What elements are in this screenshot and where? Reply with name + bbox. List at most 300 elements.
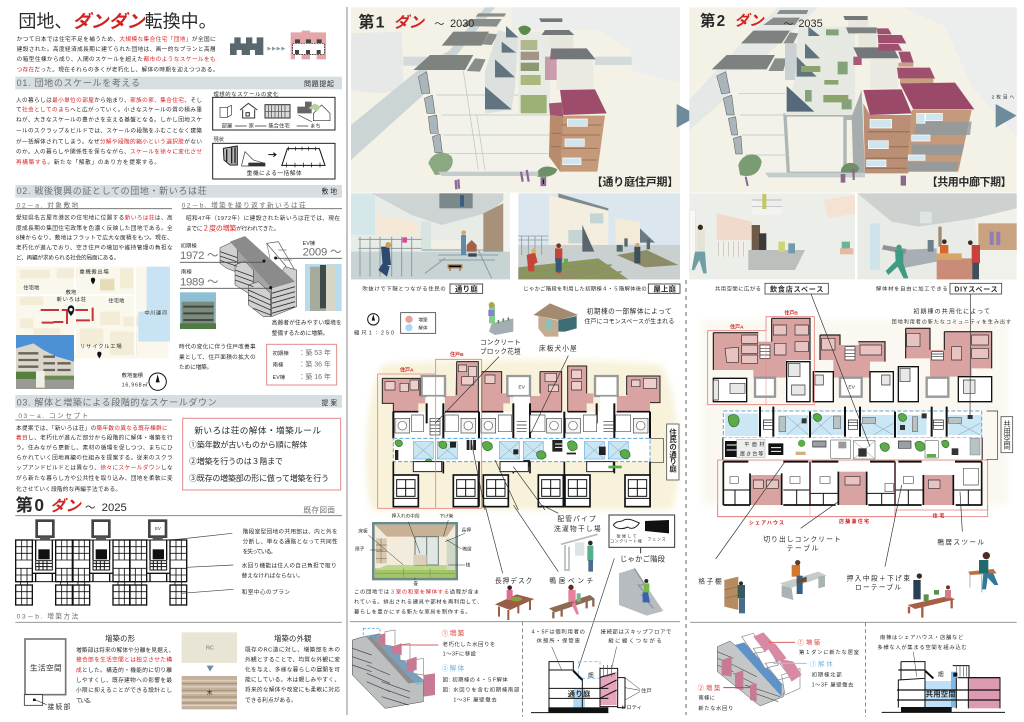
site texture [366,359,679,510]
note: commons: 住戸にコモンスペースが生まれる [584,317,674,325]
section band 01 [15,77,342,89]
dashed divider [685,280,687,715]
02-b heading: 02－b. 増築を繰り返す新いろは荘 [182,200,306,209]
icon: scale down diagram [230,31,326,59]
rule box [183,418,341,490]
tatami room drawing: 桟 [466,561,471,567]
age table: 初期棟 [273,349,289,357]
section 01 text: て社会としてのまちへと広がっていく。小さなスケールの質の積み重 [16,105,202,113]
intro text: 建設された。高度経済成長期に建てられた団地は、画一的なプランと高層 [17,45,216,53]
03-a text [16,424,173,493]
floor plan lower [723,462,982,505]
site area and compass: 敷地面積 [122,371,144,379]
section 01 text: のか。人の暮らしや関係性を保ちながら、スケールを徐々に変化させ [16,148,202,156]
callout: gabion stairs: コンクリート塊 [610,537,642,543]
figure: gabion stairs [619,568,663,616]
unit outlines: 住戸B [450,351,464,358]
age table: ：築 53 年 [298,348,331,357]
labels stage 2 isometric: 初期棟北部 [812,671,842,679]
03-a text: 着目し、老朽化が進んだ部分から段階的に解体・増築を行 [16,434,173,442]
divider [690,621,1017,624]
02-b notes: ために増築。 [179,363,212,371]
building era labels: 1972 ～ [180,250,218,262]
03-a text: 本提案では、「新いろは荘」の築年数の異なる既存棟群に [16,424,168,432]
unit labels: シェアハウス [749,519,784,526]
extension form text: ている。 [76,698,94,705]
perspective: restaurant space [689,193,855,279]
section band 02: 敷地 [322,187,337,196]
furniture: bench: 鴨居ベンチ [549,576,594,585]
building era labels [180,239,342,289]
03-a heading: 03－a. コンセプト [18,412,88,420]
section 01 text [16,96,202,166]
caption: restaurant space [715,283,828,294]
heading: stage 2: ダン [734,12,765,29]
section stage 2: 共用空間 [926,690,956,699]
unit labels [749,512,944,526]
section 01 text: が一括解体されてしまう。なぜ分解や段階的縮小という選択肢がない [16,137,202,145]
section stage 1: 通り庭 [568,690,591,699]
site texture [702,320,1008,505]
panel: stage 2 perspectives [689,193,1017,294]
tatami room drawing: 障子 [355,546,365,553]
caption: DIY space: DIYスペース [954,285,998,293]
notes: floor plan: 替えなければならない。 [242,571,303,579]
panel: stage 2 plan [702,294,1013,517]
section stage 2: 畑 [938,671,944,679]
section stage 2: 南棟はシェアハウス・店舗など [880,633,964,641]
divider dashed [521,622,523,717]
extension appearance text: 将来的な解体や改変にも柔軟に対応 [245,685,340,693]
tatami room drawing [355,513,472,587]
label: shared space [987,411,1013,459]
figure: dog house [533,303,578,337]
furniture: concrete table: 切り出しコンクリート [763,534,841,543]
floor plan [382,362,660,507]
panel: stage 2 furniture and sections [690,462,1017,717]
site map [16,267,170,358]
02-a text: 度成長期の集団住宅政策を色濃く反映した団地である。全 [16,224,173,232]
heading: stage 2: 2035 [798,18,823,30]
isometric stage 2 [717,632,802,706]
section stage 1: 接続部はスキップフロアで [601,627,671,635]
age table: ：築 16 年 [298,372,331,381]
diagram: ideal scale change: 理想的なスケールの変化 [213,90,279,98]
furniture: concrete table: テーブル [787,543,819,552]
tatami room drawing: 畳 [413,581,418,587]
leader lines [485,505,614,668]
labels stage 2 isometric: ①増築 [798,637,821,646]
site area and compass [122,371,166,390]
note: community: 団地利用者の新たなコミュニティを生み出す [892,318,1011,325]
perspective: passage garden [351,193,510,279]
site map: 住宅地 [108,297,125,305]
labels stage 1 isometric: 1～3F 屋壁撤去 [453,696,497,704]
notes: floor plan: 水回り機能は住人の自己負担で取り [242,561,337,569]
site map: 住宅地 [23,283,40,291]
age table [267,344,337,385]
title: 団地、ダンダン転換中。 [18,11,217,31]
site area and compass: 16,968㎡ [122,381,148,389]
legend [401,313,436,333]
divider [350,620,680,623]
intro text: の箱型住棟から成り、人間のスケールを超えた都市のようなスケールをも [17,55,216,63]
section 01 text: ールのスクラップ＆ビルドでは、スケールの段階をふむことなく建築 [16,127,202,135]
furniture: concrete table [763,534,841,600]
perspective: roof garden [518,193,680,279]
unit outlines: 住戸A [400,367,414,374]
labels stage 2 isometric: 1～3F 屋壁撤去 [812,681,854,689]
section stage 1: 4・5Fは個利用者の [532,627,585,635]
heading: stage 1: ～ [434,19,444,30]
caption: passage garden: 通り庭 [455,284,478,293]
site photo [16,335,74,389]
figure: planter [488,302,513,335]
section band 03 [15,395,342,408]
heading: stage 0: ダン [50,497,82,515]
section 01 text: 人の暮らしは最小単位の部屋から始まり、家族の家、集合住宅、そし [16,96,202,104]
furniture: lattice shelf: 格子棚 [698,577,722,586]
leader lines [716,462,962,567]
03 lower [15,521,342,711]
diagram: current state: 重機による一括解体 [247,169,302,177]
note: commons [584,306,674,325]
note: community [892,307,1011,325]
unit outlines [708,309,814,405]
section band 02: 02. 戦後復興の証としての団地・新いろは荘 [17,185,207,196]
02-b notes: 時代の変化に伴う住戸改善事 [179,342,256,350]
section stage 1: 住戸 [641,686,652,694]
label: shared space: 共用空間 [1002,419,1011,450]
extension appearance text: できる利点がある。 [245,696,297,704]
extension form text: しやすくし、既存建物への影響を最 [76,676,172,684]
labels stage 1 isometric: 老朽化した水回りを [443,640,495,648]
02-a text: 愛知県名古屋市港区の住宅地に位置する新いろは荘は、高 [16,213,173,221]
building era labels: EV棟 [303,239,316,247]
extension plan diagram: 生活空間 [30,663,62,673]
caption: passage garden: 吹抜けで下階とつながる住民の [362,285,446,293]
extension form text: 増築の形 [105,634,136,643]
labels stage 1 isometric [400,629,520,704]
rule box: ②増築を行うのは３階まで [189,456,283,466]
03-a text: う。住みながら更新し、素材の循環を促しつつ、まちにひ [16,443,173,451]
arrow [677,104,698,128]
age table: ：築 36 年 [298,360,331,369]
furniture: bench [549,576,595,618]
section band 03: 提案 [322,398,337,407]
material swatches [182,632,237,709]
diagram: ideal scale change: 家 [249,122,255,130]
lower furniture row [723,438,982,460]
diagram: current state: 現状 [213,135,225,143]
labels stage 2 isometric [698,637,860,712]
panel: stage 2 rendering [689,7,1017,193]
diagram: ideal scale change [213,90,335,130]
furniture: low table [847,573,955,618]
divider dashed [865,622,867,717]
02-b text: 昭和47年（1972年）に建設された新いろは荘では、現在 [186,214,340,222]
section stage 1 [531,627,671,713]
extension form text: 小限に抑えることができる設計とし [76,686,172,694]
leader lines [435,356,568,510]
label: residents passage: 住民の通り庭 [668,428,677,473]
furniture: lattice shelf [698,577,745,613]
02-b notes: 整備するために増築。 [272,329,328,337]
age table: EV棟 [273,373,286,381]
material swatches: RC [206,645,214,651]
photo: EV block [305,264,342,311]
extension form text: 成とした。構造的・機能的に切り離 [76,666,172,674]
caption: restaurant space: 共用空間に広がる [715,285,761,293]
02-b notes [179,318,342,371]
diagram: current state [213,135,335,179]
label: planter: ブロック花壇 [480,347,521,356]
diagram: ideal scale change: 集合住宅 [268,122,290,130]
compass and scale [354,314,394,337]
furniture: stool [937,538,998,592]
02-a text: 8棟からなり、敷地はフラットで広大な面積をもつ。現在、 [16,234,173,242]
legend: 解体 [418,325,428,332]
callout: gabion stairs: じゃかご階段 [620,554,666,563]
lower furniture row: 平面材 [744,441,764,448]
lower outline divider [810,460,895,517]
text: reused fittings: れている。排出される建具や部材を再利用して、 [354,597,482,605]
furniture: laundry rack: 配管パイプ [557,514,596,523]
perspective: DIY space [857,193,1017,279]
extension form text: 接合部を生活空間とは独立させた構 [76,656,172,664]
heading: stage 0: ～ [85,502,96,514]
section band 02 [15,185,342,198]
arrow [996,104,1017,128]
section 02 [15,185,342,390]
unit labels: 住宅 [933,512,944,519]
section stage 1: 休憩所・保管庫 [537,637,581,645]
caption: restaurant space: 飲食店スペース [770,284,823,293]
note: shared space [172,528,338,555]
furniture: laundry rack: 洗濯物干し場 [554,524,601,533]
label: dog house: 床板犬小屋 [539,343,577,352]
existing floor plan: EV [155,526,161,531]
site map: 敷地 [66,288,77,296]
building era labels: 2009 ～ [303,247,341,259]
heading: stage 2: 第2 [700,12,725,30]
lower furniture row: 置き台等 [740,451,763,458]
panel: stage 1 perspectives [351,193,680,293]
unit outlines: 住戸B [784,309,798,316]
heading: stage 0 [15,495,342,516]
02-b text [186,214,340,233]
section stage 1: 畑 [588,672,594,680]
extension appearance text: 外観とすることで、均質な外観に変 [245,656,340,664]
note: next sheet: 2枚目へ [992,93,1015,100]
section band 01: 01. 団地のスケールを考える [17,77,140,88]
03-a text: ップアンドビルドとは異なり、徐々にスケールダウンしな [16,463,173,471]
site map: 中川運河 [144,308,168,316]
label: planter: コンクリート [480,339,521,347]
labels stage 2 isometric: ①解体 [810,659,833,668]
section 01 text: ねが、大きなスケールの豊かさを支える基盤となる。しかし団地スケ [16,115,202,123]
material swatches: 木 [207,689,213,697]
callout: gabion stairs: フェンス [647,537,666,542]
labels stage 1 isometric: ②解体 [442,664,465,673]
tatami room drawing: 下げ束 [439,513,454,520]
photo: south block [180,292,216,329]
note: community: 初期棟の共用化によって [913,307,990,315]
building era labels: 1989 ～ [180,277,218,289]
rule box: ①築年数が古いものから順に解体 [189,440,307,450]
heading: stage 2: ～ [783,20,793,31]
extension plan diagram: 接続部 [48,702,71,711]
caption: roof garden: じゃかご階段を利用した初期棟４・５階解体後の [523,285,647,293]
tatami room drawing: 長押 [462,527,471,534]
labels stage 1 isometric: ①増築 [442,629,465,638]
03-b heading: 03－b. 増築方法 [17,611,79,620]
heading: stage 1: 第1 [358,12,385,31]
site map: リサイクル工場 [80,342,122,350]
intro text: かつて日本では住宅不足を補うため、大規模な集合住宅「団地」が全国に [17,35,216,43]
section stage 2 [877,633,1005,712]
rule box: ③既存の増築部の形に倣って増築を行う [189,473,329,483]
rule box: 新いろは荘の解体・増築ルール [194,424,321,435]
extension form text [76,634,174,705]
age table: 南棟 [273,361,284,369]
02-a heading: 02－a. 対象敷地 [17,200,79,209]
extension appearance text: 増築の外観 [274,634,312,643]
03-a text: らかれていく団地再編の仕組みを提案する。従来のスクラ [16,453,173,461]
caption: stage 2: 【共用中廊下期】 [927,174,1012,188]
notes: floor plan [182,561,337,596]
heading: stage 2 [700,12,823,31]
diagram: ideal scale change: 部屋 [222,123,233,130]
isometric building [220,236,297,317]
lower outline [718,460,988,517]
floor plan upper: EV [848,384,856,390]
extension appearance text: 化を与え、多様な暮らしの展開を可 [245,666,340,674]
section stage 2: 多様な人が集まる空間を組み込む [877,643,967,651]
heading: stage 0: 既存図面 [303,504,335,514]
extension form text: 増築部は将来の解体や分離を見据え、 [76,646,174,654]
extension appearance text [245,634,340,704]
text: reused fittings [354,587,482,615]
leader lines [811,294,971,447]
labels stage 1 isometric: 図: 初期棟の４・５F解体 [443,676,508,684]
unit outlines [378,351,482,508]
labels stage 1 isometric: 図: 水回りを含む初期棟南部 [443,686,520,694]
02-b notes: 高齢者が住みやすい環境を [272,318,342,326]
panel: stage 1 furniture and sections [350,505,680,717]
site map: 重機搬出場 [79,268,109,276]
03-a text: 化させていく段階的な再編手法である。 [16,485,121,493]
note: shared space: を失っている。 [243,547,276,555]
note: commons: 初期棟の一部解体によって [587,306,672,315]
existing floor plan [16,521,187,605]
floor plan upper [713,318,992,402]
02-b notes: 業として、住戸面積の拡大の [179,353,256,361]
labels stage 2 isometric: 南棟に [698,693,715,701]
furniture: low table: 押入中段＋下げ束 [847,573,910,582]
labels stage 1 isometric: 1～3Fに移設 [443,650,477,658]
caption: stage 1: 【通り庭住戸期】 [592,174,678,188]
callout: gabion stairs: 耐候して [617,533,637,539]
note: shared space: 分断し、単なる通路となって共同性 [243,538,338,546]
building era labels: 南棟 [181,267,192,275]
column divider [346,7,348,715]
furniture: stool: 鴨居スツール [937,538,984,547]
02-b text: までに２度の増築が行われてきた。 [186,224,279,233]
heading: stage 0: 第0 [16,495,44,515]
callout: gabion stairs [609,515,675,563]
furniture: low table: ローテーブル [855,583,901,592]
section band 01: 問題提起 [304,79,334,88]
furniture: desk: 長押デスク [495,576,532,585]
heading: stage 1 [358,12,474,31]
section 01 text: 再構築する。新たな「解散」のあり方を提案する。 [16,158,160,166]
02-a text: 老朽化が進んでおり、空き住戸の増加や維持管理の負担な [16,244,173,252]
caption: DIY space: 解体材を自由に加工できる [876,285,948,293]
section 01 [15,77,342,179]
extension plan diagram [24,639,71,711]
section stage 1: 縦に緩くつながる [608,636,662,644]
notes: floor plan: 和室中心のプラン [242,588,290,596]
text: reused fittings: この団地では３室の和室を解体する過程が含ま [354,587,479,595]
tatami room drawing: 鴨居 [462,546,472,553]
caption: passage garden [362,284,483,293]
caption: roof garden: 屋上庭 [653,284,677,293]
unit outlines: 住戸A [730,323,744,330]
tatami room drawing: 押入れの中段 [392,513,420,520]
heading: stage 1: 2030 [450,18,474,30]
labels stage 2 isometric: ②増築 [698,683,721,692]
label: residents passage [650,424,679,480]
note: shared space: 階段室型団地の共用部は、内と外を [243,528,338,536]
compass and scale: 縮尺1：250 [354,329,394,337]
diagram: ideal scale change: まち [310,123,321,130]
02-a text [16,213,173,262]
panel: stage 1 rendering [351,7,698,193]
furniture: desk [495,576,534,620]
site map: 新いろは荘 [57,295,87,303]
isometric stage 1 [352,628,435,708]
legend: 増築 [418,316,428,323]
furniture: laundry rack [554,514,601,572]
extension appearance text: 能にしている。木は親しみやすく、 [245,676,340,684]
text: reused fittings: 暮らしを豊かにする新たな家具を制作する。 [354,607,471,615]
label: planter [480,339,521,356]
plan bottom [718,505,988,517]
floor plan: EV [518,384,526,390]
heading: stage 1: ダン [393,13,426,31]
labels stage 2 isometric: 第１ダンに新たな居室 [799,648,860,656]
heading: stage 0: 2025 [102,502,127,514]
panel: stage 1 plan [354,302,679,510]
section stage 1: ピロティ [621,704,642,711]
intro text: つ存在だった。現在それらの多くが老朽化し、解体の時期を迎えつつある。 [17,65,218,73]
02-a text: ど、再編が求められる社会的局面にある。 [16,254,119,262]
title and intro [17,11,326,73]
left column [15,11,342,711]
caption: DIY space [876,283,1002,294]
section 03 [15,395,342,555]
03-a text: がら新たな暮らし方や公共性を取り込み、団地を柔軟に変 [16,474,173,482]
section band 03: 03. 解体と増築による段階的なスケールダウン [17,396,217,407]
extension appearance text: 既存のRC造に対し、増築部を木の [245,646,340,654]
shared corridor [723,407,982,460]
building era labels: 初期棟 [181,241,197,249]
tatami room drawing: 床板 [358,527,368,534]
unit labels: 店舗兼住宅 [839,518,869,525]
intro text [17,35,218,73]
labels stage 2 isometric: 新たな水回り [698,704,733,712]
